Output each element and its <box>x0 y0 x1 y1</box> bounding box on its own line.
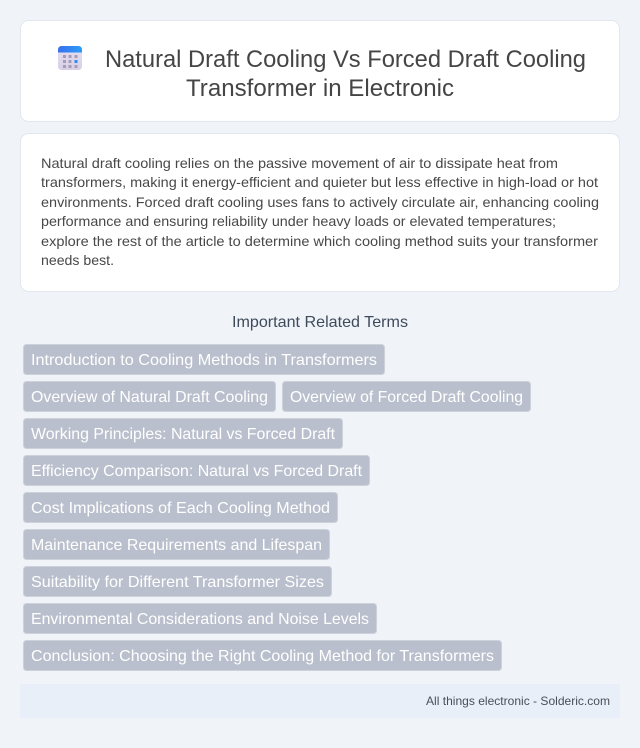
title: Transformer in Electronic <box>186 75 454 102</box>
title <box>105 46 586 102</box>
text block: description <box>41 155 599 268</box>
chip: efficiency: Efficiency Comparison: Natural vs Forced Draft <box>31 463 363 480</box>
chip: introduction: Introduction to Cooling Methods in Transformers <box>31 352 377 369</box>
text block: description: environments. Forced draft cooling uses fans to actively circulate air, enhancing cooling <box>41 194 599 210</box>
chip: natural draft overview: Overview of Natural Draft Cooling <box>31 389 268 406</box>
chip: working principles <box>24 418 342 448</box>
text block: description: Natural draft cooling relies on the passive movement of air to dissipate heat from <box>41 155 558 171</box>
heading: important related terms: Important Related Terms <box>232 314 408 331</box>
icon: calendar <box>58 46 82 70</box>
chip: maintenance: Maintenance Requirements and Lifespan <box>31 537 322 554</box>
chip: efficiency <box>24 456 370 486</box>
chip: conclusion: Conclusion: Choosing the Right Cooling Method for Transformers <box>31 648 494 665</box>
text block: description: explore the rest of the article to determine which cooling method suits your transformer <box>41 233 598 249</box>
chip: cost: Cost Implications of Each Cooling Method <box>31 500 330 517</box>
panel: header card <box>20 20 620 122</box>
chip: forced draft overview <box>282 382 530 412</box>
chip: environmental: Environmental Considerations and Noise Levels <box>31 611 369 628</box>
text block: description: transformers, making it energy-efficient and quieter but less effective in high-load or hot <box>41 174 598 190</box>
title: Natural Draft Cooling Vs Forced Draft Cooling <box>105 46 586 73</box>
text block: description: needs best. <box>41 252 114 268</box>
chip: environmental <box>24 604 376 634</box>
chip: conclusion <box>24 640 502 670</box>
chip: suitability <box>24 566 332 596</box>
chip: suitability: Suitability for Different Transformer Sizes <box>31 574 324 591</box>
chip: natural draft overview <box>24 382 276 412</box>
chip: introduction <box>24 344 384 374</box>
footer <box>20 684 620 718</box>
chip: working principles: Working Principles: Natural vs Forced Draft <box>31 426 336 443</box>
chip: maintenance <box>24 530 330 560</box>
chip: forced draft overview: Overview of Forced Draft Cooling <box>290 389 523 406</box>
chip: cost <box>24 492 338 522</box>
footer: All things electronic - Solderic.com <box>426 694 610 708</box>
panel: description card <box>20 134 620 292</box>
panel: related terms chips <box>24 344 530 670</box>
text block: description: performance and ensuring reliability under heavy loads or elevated temperatures; <box>41 213 556 229</box>
